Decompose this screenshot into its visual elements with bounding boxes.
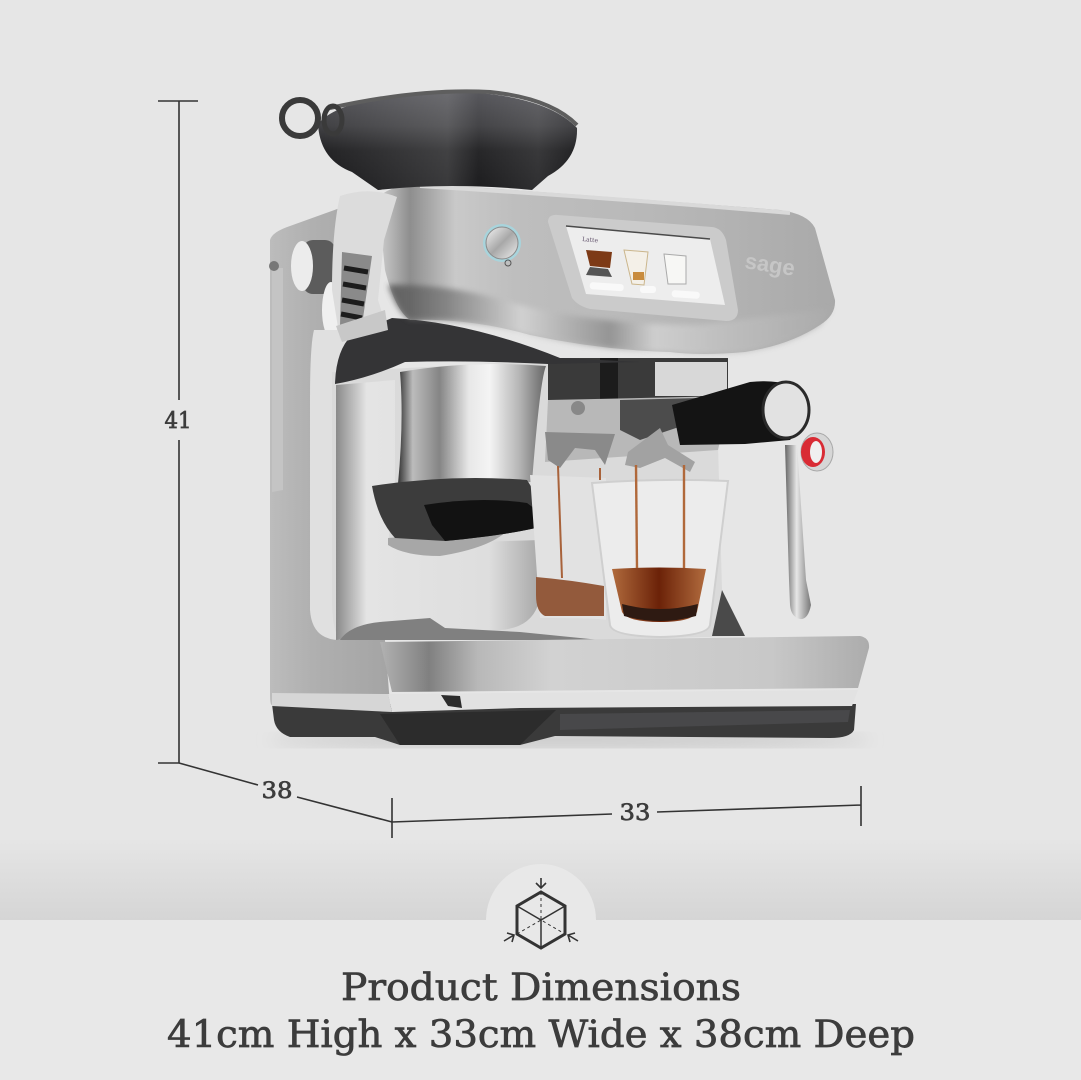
icon: coffee puck [586,250,612,268]
chrome recess [332,360,745,640]
base and feet [272,704,856,745]
bean hopper [318,91,577,190]
rear knobs [269,240,340,338]
dark band under head [335,318,640,384]
top rim highlight [420,186,790,213]
back glass [530,466,606,620]
hopper lid ring [282,100,342,136]
title: Product Dimensions [341,966,741,1009]
chute reflection [388,530,508,556]
sage logo: sage [743,248,797,281]
steam arm knob [672,381,809,445]
power button [483,224,521,266]
dark foot of recess [712,590,745,636]
front column [310,330,350,640]
jug collar [372,478,554,541]
label: width 33: 33 [620,801,650,826]
dimension lines [158,101,861,838]
machine head [378,184,835,354]
label: depth 38: 38 [262,779,292,804]
red steam dial [801,433,833,471]
water tank window [272,268,283,492]
milk jug [398,364,546,484]
touch screen [566,226,725,305]
bottom caption panel [0,920,1081,1080]
label: height 41: 41 [164,409,192,434]
icon: milk jug [664,254,686,284]
icon: latte glass [624,250,648,285]
reflected tank [336,380,540,640]
side column [270,208,390,705]
shadow under machine [270,733,870,747]
drip tray [272,636,869,712]
touch screen: Latte [582,236,599,244]
front glass [592,465,728,637]
steam wand [785,445,811,619]
lower tank reflection [340,618,600,640]
screen surround [548,215,738,321]
glass grinder chute [332,191,397,342]
icon: dimensions cube badge [486,864,596,948]
coffee machine [269,91,870,747]
subtitle: 41cm High x 33cm Wide x 38cm Deep [167,1013,915,1056]
group head and portafilters [545,358,730,472]
